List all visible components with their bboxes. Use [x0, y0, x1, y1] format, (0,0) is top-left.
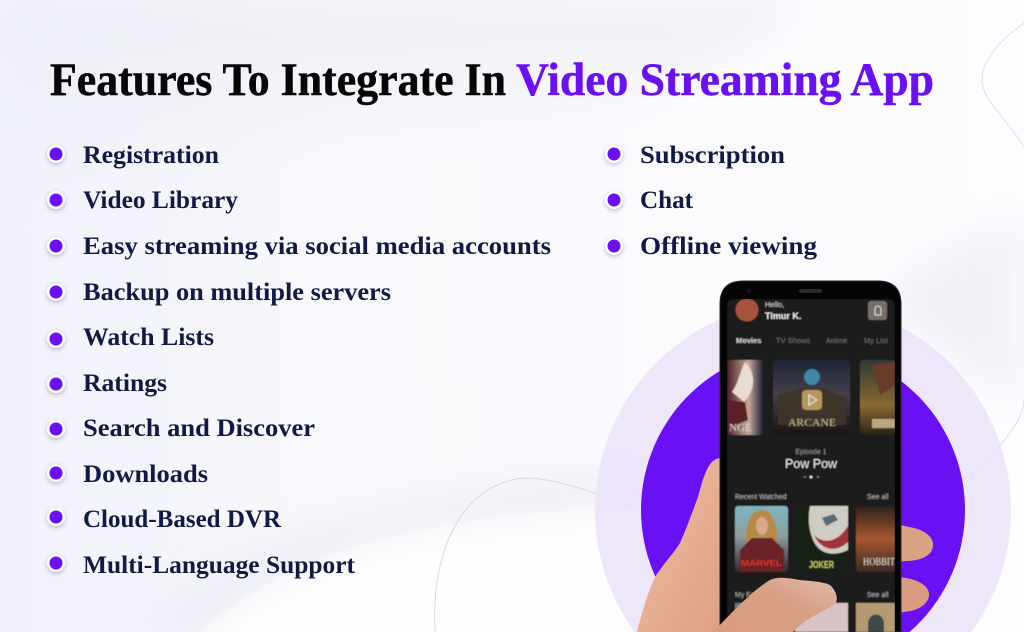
item: Backup: Backup on multiple servers	[83, 279, 391, 306]
recent watched row: HOBBIT	[863, 556, 895, 568]
item: Multi-Language Support: Multi-Language Support	[83, 552, 356, 579]
item: Subscription: Subscription	[640, 142, 785, 169]
user header: Hello,	[765, 300, 784, 309]
hand: thumb	[713, 578, 837, 632]
item: Video Library: Video Library	[83, 187, 239, 214]
episode info	[785, 449, 838, 478]
item: Registration: Registration	[83, 142, 219, 169]
feature list: right column	[605, 142, 818, 260]
backdrop circles	[595, 302, 1011, 632]
recent watched row: Recent Watched	[735, 494, 787, 501]
user header: Timur K.	[765, 311, 801, 321]
app screen	[727, 298, 895, 632]
user header	[736, 298, 887, 322]
recent watched row: See all	[867, 494, 889, 501]
item: Search and Discover: Search and Discover	[83, 415, 315, 442]
feature list: left column	[47, 142, 551, 579]
item: Offline viewing: Offline viewing	[640, 233, 818, 260]
item: Watch Lists: Watch Lists	[83, 324, 214, 351]
favourites row: See all	[867, 592, 889, 599]
phone illustration	[595, 281, 1011, 632]
featured posters: NGE	[729, 422, 752, 434]
item: Ratings	[47, 370, 167, 397]
item: Downloads: Downloads	[83, 461, 208, 488]
category tabs: Anime	[826, 336, 847, 345]
category tabs: Movies	[736, 336, 761, 345]
title: Features To Integrate In	[50, 54, 506, 106]
favourites row	[735, 592, 895, 632]
item: Cloud-Based DVR: Cloud-Based DVR	[83, 506, 282, 533]
category tabs: My List	[864, 336, 889, 345]
hand: palm and fingers	[637, 458, 933, 632]
featured posters	[727, 360, 895, 435]
episode info: Episode 1	[795, 449, 827, 456]
title: Video Streaming App	[516, 54, 934, 106]
item: Chat	[605, 187, 694, 214]
featured posters: ARCANE	[788, 417, 836, 429]
recent watched row: JOKER	[809, 560, 835, 571]
phone sensors	[747, 289, 822, 293]
category tabs: TV Shows	[776, 336, 810, 345]
recent watched row: MARVEL	[741, 559, 782, 568]
category tabs	[736, 336, 889, 345]
episode info: Pow Pow	[785, 457, 838, 471]
item: Easy streaming: Easy streaming via social media accounts	[83, 233, 551, 260]
recent watched row	[735, 494, 895, 572]
item: Ratings: Ratings	[83, 370, 167, 397]
title	[50, 54, 934, 106]
phone body	[720, 281, 901, 632]
item: Chat: Chat	[640, 187, 694, 214]
favourites row: My Favourites	[735, 592, 779, 599]
